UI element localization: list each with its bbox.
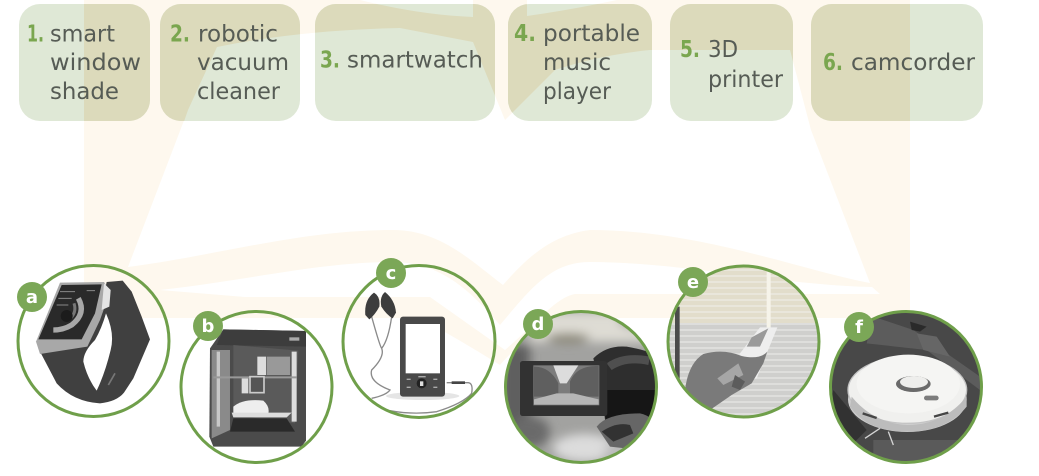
ring a (18, 266, 169, 416)
label 1: smart window shade: window (50, 50, 141, 76)
badge c (376, 258, 406, 288)
label 6: camcorder: 6. (823, 50, 843, 76)
label 2: robotic vacuum cleaner: 2. (170, 22, 190, 48)
label 1: smart window shade: shade (50, 79, 119, 105)
label 3: smartwatch: 3. (320, 48, 340, 74)
watermark: book logo (84, 0, 910, 365)
label 5: 3D printer (680, 37, 784, 93)
label 1: smart window shade: smart (50, 22, 115, 48)
label 4: portable music player: player (543, 79, 612, 105)
picture e: smart window shade remote (665, 263, 825, 423)
label 2: robotic vacuum cleaner: vacuum (197, 50, 289, 76)
label 4: portable music player: music (543, 50, 611, 76)
badge f (844, 312, 874, 342)
badge e (678, 267, 708, 297)
label 5: 3D printer: 5. (680, 37, 700, 63)
ring f (830, 312, 982, 462)
picture d: camcorder (500, 308, 662, 468)
badge c: c (386, 263, 396, 284)
label 4: portable music player: portable (543, 21, 640, 47)
picture c: portable music player with earphones (343, 258, 495, 418)
label 4: portable music player: 4. (514, 21, 536, 47)
label 1: smart window shade (27, 22, 141, 105)
ring c (343, 266, 495, 418)
badge a (17, 282, 47, 312)
ring e (668, 266, 819, 417)
label 5: 3D printer: 3D (708, 37, 738, 63)
badge d: d (532, 314, 544, 335)
picture f: robotic vacuum cleaner (827, 309, 987, 465)
label 1: smart window shade: 1. (27, 22, 44, 48)
label 2: robotic vacuum cleaner: cleaner (197, 79, 281, 105)
label 2: robotic vacuum cleaner (170, 22, 289, 105)
picture b: 3D printer (181, 311, 332, 462)
badge b (193, 311, 223, 341)
answer box backgrounds (19, 4, 983, 121)
badge e: e (687, 272, 699, 293)
label 4: portable music player (514, 21, 640, 105)
label 5: 3D printer: printer (708, 67, 784, 93)
ring d (506, 312, 656, 462)
badge a: a (26, 287, 38, 308)
label 3: smartwatch: smartwatch (347, 48, 483, 74)
picture a: smartwatch (17, 266, 169, 416)
badge b: b (202, 316, 215, 337)
badge d (523, 309, 553, 339)
label 2: robotic vacuum cleaner: robotic (198, 22, 278, 48)
label 6: camcorder: camcorder (851, 50, 976, 76)
badge f: f (855, 317, 863, 338)
ring b (181, 312, 332, 462)
